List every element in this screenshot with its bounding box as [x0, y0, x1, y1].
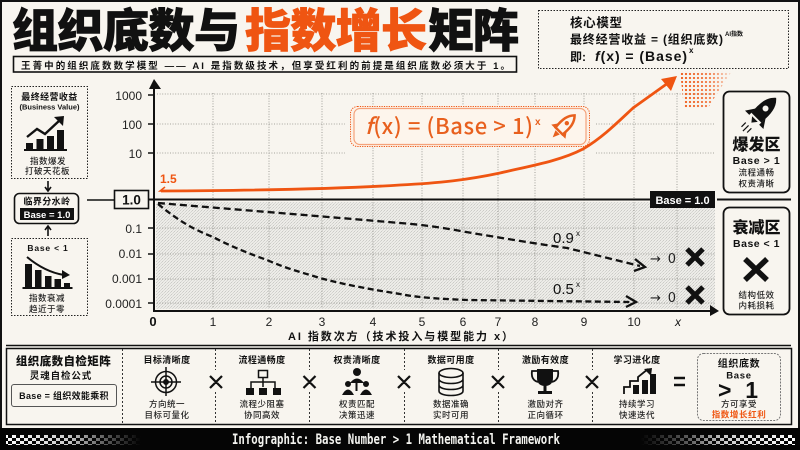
- footer bar: Infographic: Base Number > 1 Mathematical Framework: [232, 432, 560, 448]
- left panel: business value: 最终经营收益: [21, 91, 78, 102]
- left panel: decay: 指数衰减: [29, 293, 65, 303]
- x axis labels: 6: [460, 315, 467, 329]
- panel: decay zone: 结构低效: [738, 290, 775, 300]
- core model box: x: [689, 46, 694, 55]
- icon: target: [151, 367, 181, 396]
- x axis labels: 2: [266, 315, 273, 329]
- panel: burst zone: Base > 1: [733, 155, 780, 167]
- formula callout: f(x) = (Base > 1): [365, 109, 533, 141]
- label: 1.0 box: [114, 190, 148, 208]
- dashed curve 0.5^x: x: [576, 280, 580, 289]
- baseline tag: [650, 191, 715, 208]
- factor: data: 数据可用度: [427, 354, 475, 365]
- factor: goal clarity: 目标可量化: [144, 410, 190, 420]
- core model box: [538, 10, 788, 68]
- factor: learning: 学习进化度: [613, 354, 661, 365]
- baseline tag: Base = 1.0: [655, 195, 710, 207]
- subtitle bar: 王菁中的组织底数数学模型 —— AI 是指数级技术，但享受红利的前提是组织底数必须大于 1。: [21, 60, 510, 72]
- multiply signs: [210, 376, 598, 388]
- x axis labels: [149, 314, 682, 329]
- title: [12, 5, 519, 57]
- factor: goal clarity: 方向统一: [149, 399, 185, 409]
- core model box: f(x) = (Base): [595, 48, 687, 64]
- y axis labels: 0.1: [125, 222, 142, 236]
- y axis labels: 0.0001: [105, 297, 142, 311]
- panel: decay zone: [724, 208, 790, 314]
- factor: incentives: 正向循环: [527, 410, 564, 420]
- x axis labels: 10: [627, 315, 641, 329]
- panel: burst zone: [724, 89, 790, 192]
- factor: responsibility: 权责匹配: [339, 399, 375, 409]
- x axis labels: 0: [149, 314, 157, 329]
- matrix heading: 组织底数自检矩阵: [16, 354, 111, 368]
- factor: learning: [613, 354, 661, 420]
- icon: orange rocket: [546, 108, 582, 144]
- factor: responsibility: 决策迅速: [339, 410, 375, 420]
- label: 1.0 box: 1.0: [122, 192, 141, 208]
- left panel: decay: [12, 238, 88, 316]
- y axis labels: 100: [122, 118, 142, 132]
- core model box: AI指数: [725, 30, 743, 38]
- goes to zero markers: → 0: [650, 252, 676, 267]
- core model box: 即:: [570, 50, 586, 64]
- icon: org chart: [246, 370, 281, 395]
- factor: responsibility: [333, 354, 381, 420]
- arrow: down to threshold: [45, 181, 51, 191]
- equals sign: [674, 378, 685, 385]
- icon: trophy: [532, 369, 558, 394]
- matrix heading: 灵魂自检公式: [30, 370, 92, 382]
- panel: decay zone: 内耗损耗: [738, 300, 775, 310]
- x axis labels: 7: [495, 315, 502, 329]
- dashed curve 0.9^x: 0.9: [553, 230, 574, 247]
- result box: > 1: [718, 377, 758, 403]
- panel: burst zone: 爆发区: [732, 135, 781, 154]
- result box: 组织底数: [718, 357, 760, 370]
- panel: burst zone: 流程通畅: [738, 168, 775, 178]
- dashed curve 0.9^x: x: [576, 229, 580, 238]
- x axis labels: 4: [370, 315, 377, 329]
- axes: [154, 88, 712, 311]
- factor: responsibility: 权责清晰度: [333, 354, 381, 365]
- factor: data: 实时可用: [433, 410, 469, 420]
- factor: goal clarity: 目标清晰度: [143, 354, 191, 365]
- factor: data: [427, 354, 475, 420]
- factor: learning: 持续学习: [619, 399, 655, 409]
- left panel: business value: 指数爆发: [30, 156, 66, 166]
- left panel: business value: [12, 86, 88, 178]
- title: 指数增长: [245, 5, 427, 57]
- orange exponential curve: 1.5: [160, 172, 177, 186]
- x axis labels: x: [674, 315, 682, 329]
- panel: self-check matrix: [6, 346, 792, 424]
- subtitle bar: [14, 56, 516, 72]
- x axis labels: 1: [210, 315, 217, 329]
- x axis labels: 5: [419, 315, 426, 329]
- factor: process flow: 流程少阻塞: [239, 399, 285, 409]
- matrix heading: Base = 组织效能乘积: [19, 390, 109, 401]
- y axis labels: [105, 89, 154, 311]
- threshold box: [14, 194, 78, 224]
- icon: cross: [745, 259, 767, 280]
- core model box: 最终经营收益 = (组织底数): [570, 32, 723, 46]
- threshold box: 临界分水岭: [23, 196, 71, 206]
- y axis labels: 10: [129, 147, 142, 161]
- result box: Base: [726, 370, 752, 382]
- goes to zero markers: → 0: [650, 291, 676, 306]
- left panel: business value: (Business Value): [19, 102, 80, 112]
- factor: learning: 快速迭代: [619, 410, 655, 420]
- footer bar: [0, 428, 800, 450]
- icon: database: [439, 368, 463, 396]
- left panel: business value: 打破天花板: [25, 166, 70, 176]
- dashed curve 0.5^x: 0.5: [553, 281, 574, 298]
- dashed curve 0.5^x: [158, 204, 636, 307]
- halftone burst: [680, 71, 732, 108]
- x axis labels: 3: [319, 315, 326, 329]
- icon: rising bars: [24, 116, 67, 151]
- baseline Base = 1.0: [148, 198, 791, 200]
- arrow: up to threshold: [45, 226, 51, 236]
- panel: decay zone: 衰减区: [732, 218, 781, 237]
- factor: goal clarity: [143, 354, 191, 420]
- formula callout: [350, 106, 590, 146]
- x axis title: AI 指数次方（技术投入与模型能力 x）: [288, 329, 513, 343]
- dashed curve 0.9^x: [158, 203, 645, 271]
- panel: decay zone: Base < 1: [733, 238, 780, 250]
- y axis labels: 0.01: [119, 247, 142, 261]
- result box: [698, 354, 780, 420]
- icon: rocket: [734, 89, 785, 140]
- matrix heading: [12, 354, 116, 406]
- factor: incentives: 激励对齐: [527, 399, 564, 409]
- connector to 1.0: [87, 199, 114, 201]
- x axis labels: 8: [532, 315, 539, 329]
- factor: incentives: 激励有效度: [522, 354, 569, 365]
- factor: process flow: [238, 354, 286, 420]
- chart: [105, 71, 791, 343]
- factor: process flow: 协同高效: [244, 410, 280, 420]
- left panel: decay: 趋近于零: [29, 304, 65, 314]
- result box: 指数增长红利: [712, 410, 766, 420]
- factor: data: 数据准确: [433, 399, 469, 409]
- title: 矩阵: [428, 5, 519, 57]
- icon: people: [342, 368, 372, 395]
- icon: falling bars: [22, 257, 72, 289]
- icon: stair growth: [624, 368, 656, 394]
- y axis labels: 1000: [115, 89, 142, 103]
- orange exponential curve: [160, 76, 677, 191]
- factor: incentives: [522, 354, 569, 420]
- left panel: decay: Base < 1: [27, 243, 69, 253]
- panel: burst zone: 权责清晰: [738, 178, 775, 188]
- result box: 方可享受: [721, 399, 757, 409]
- decay zone shading: [156, 202, 715, 309]
- y axis labels: 0.001: [112, 272, 142, 286]
- core model box: 核心模型: [570, 15, 622, 30]
- threshold box: Base = 1.0: [24, 210, 70, 221]
- x axis labels: 9: [581, 315, 588, 329]
- title: 组织底数与: [12, 5, 240, 57]
- factor: process flow: 流程通畅度: [238, 354, 286, 365]
- goes to zero markers: [650, 249, 703, 306]
- formula callout: x: [535, 117, 541, 128]
